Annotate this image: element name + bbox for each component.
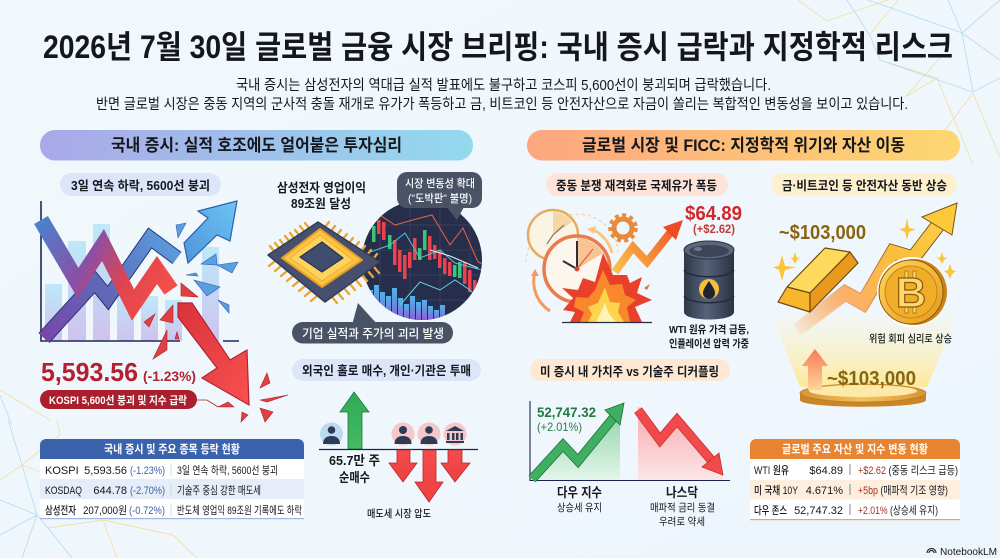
- table: global assets: 글로벌 주요 자산 및 지수 변동 현황: [782, 442, 928, 456]
- callout: KOSPI break: [40, 390, 218, 409]
- Dow value: 52,747.32: [537, 405, 596, 420]
- table: domestic market: 3일 연속 하락, 5600선 붕괴: [177, 463, 278, 477]
- label: safe haven rally: 금·비트코인 등 안전자산 동반 상승: [782, 179, 947, 193]
- text: WTI note: [669, 323, 749, 350]
- table: domestic market: 5,593.56: [84, 465, 127, 477]
- oil price: $64.89: [685, 203, 742, 225]
- KOSPI value: 5,593.56: [41, 357, 138, 387]
- text: selling pressure: 매도세 시장 압도: [367, 507, 431, 520]
- table: global assets: 미 국채 10Y: [754, 484, 799, 497]
- table: global assets: WTI 원유: [754, 463, 789, 477]
- chart: KOSPI crash with breaking arrows: [41, 201, 288, 422]
- icon: investor: [418, 422, 440, 446]
- label: safe haven rally: [771, 173, 957, 196]
- table: domestic market: (-2.70%): [130, 485, 165, 497]
- label: foreigners buying: 외국인 홀로 매수, 개인·기관은 투매: [302, 363, 471, 378]
- text: Dow note: 다우 지수: [557, 485, 602, 500]
- icon: bitcoin coin: B: [896, 269, 926, 316]
- table: domestic market: (-0.72%): [129, 505, 165, 517]
- text: WTI note: WTI 원유 가격 급등,: [669, 323, 749, 336]
- text: Dow note: 상승세 유지: [557, 502, 602, 514]
- table: global assets: [750, 439, 960, 520]
- background network lines: bottom left: [0, 390, 197, 558]
- intro text: [96, 77, 908, 113]
- text: Nasdaq note: [650, 485, 715, 528]
- intro text: 국내 증시는 삼성전자의 역대급 실적 발표에도 불구하고 코스피 5,600선이 붕괴되며 급락했습니다.: [236, 77, 771, 94]
- KOSPI value: [41, 357, 196, 387]
- label: decoupling: [530, 359, 730, 381]
- label: decoupling: 미 증시 내 가치주 vs 기술주 디커플링: [540, 364, 719, 379]
- heading: Samsung operating profit: [277, 181, 366, 211]
- Dow value: [537, 405, 596, 434]
- text: Nasdaq note: 매파적 금리 동결: [650, 502, 715, 514]
- table: global assets: $64.89: [809, 465, 843, 477]
- callout: market volatility: ("도박판" 불명): [408, 192, 472, 205]
- chart: volatile candlestick circle: [362, 200, 485, 320]
- text: net buy volume: [329, 453, 380, 485]
- NotebookLM watermark: NotebookLM: [940, 547, 997, 558]
- table: global assets: +2.01% (상승세 유지): [858, 504, 938, 517]
- text: WTI note: 인플레이션 압력 가중: [669, 337, 749, 350]
- table: domestic market: KOSPI: [45, 465, 79, 477]
- label: three day decline: [60, 173, 221, 196]
- heading: Samsung operating profit: 삼성전자 영업이익: [277, 181, 366, 195]
- intro text: 반면 글로벌 시장은 중동 지역의 군사적 충돌 재개로 유가가 폭등하고 금, 비트코인 등 안전자산으로 자금이 쏠리는 복합적인 변동성을 보이고 있습니다.: [96, 96, 908, 113]
- label: oil surge: 중동 분쟁 재격화로 국제유가 폭등: [556, 178, 717, 193]
- arrow: investor selling: [415, 450, 443, 502]
- arrow: net purchase: [340, 392, 369, 449]
- icon: bitcoin coin: [877, 257, 947, 327]
- icon: sparkles: [773, 218, 956, 281]
- KOSPI value: (-1.23%): [143, 368, 196, 384]
- callout: KOSPI break: KOSPI 5,600선 붕괴 및 지수 급락: [49, 393, 187, 407]
- panel heading: global market: [527, 130, 960, 160]
- table: domestic market: 644.78: [93, 485, 127, 497]
- chart: Dow vs Nasdaq: [530, 401, 730, 480]
- icon: semiconductor chip: [268, 222, 380, 303]
- table: global assets: 4.671%: [806, 485, 843, 497]
- table: global assets: +$2.62 (중동 리스크 급등): [858, 464, 958, 477]
- callout: earnings and stock price divergence: [292, 303, 453, 344]
- icon: gold bar: [778, 248, 858, 312]
- arrow: retail selling: [389, 450, 417, 482]
- icon: foreign investor: [320, 422, 343, 446]
- icon: retail investor: [392, 422, 414, 446]
- label: foreigners buying: [292, 359, 481, 381]
- label: oil surge: [546, 173, 728, 196]
- callout: market volatility: 시장 변동성 확대: [405, 176, 475, 190]
- table: domestic market: 삼성전자: [45, 504, 76, 517]
- illustration: clocks, gear and explosion: [526, 210, 683, 322]
- callout: earnings and stock price divergence: 기업 실적과 주가의 괴리 발생: [302, 327, 444, 341]
- label: three day decline: 3일 연속 하락, 5600선 붕괴: [71, 179, 210, 193]
- panel heading: global market: 글로벌 시장 및 FICC: 지정학적 위기와 자산 이동: [582, 136, 905, 155]
- value: gold price: ~$103,000: [779, 222, 866, 244]
- text: Nasdaq note: 우려로 약세: [659, 516, 705, 528]
- table: domestic market: (-1.23%): [130, 465, 165, 477]
- text: Dow note: [557, 485, 602, 514]
- table: global assets: 다우 존스: [754, 504, 787, 517]
- icon: oil barrel: [684, 241, 734, 320]
- heading: Samsung operating profit: 89조원 달성: [291, 197, 351, 211]
- text: Nasdaq note: 나스닥: [666, 485, 698, 500]
- text: risk aversion: 위험 회피 심리로 상승: [869, 332, 952, 345]
- background network lines: top right: [798, 0, 1000, 165]
- illustration: light beam and podium: [772, 312, 958, 407]
- table: global assets: 52,747.32: [794, 505, 843, 517]
- Dow value: (+2.01%): [537, 420, 582, 434]
- callout: market volatility: [397, 172, 482, 220]
- text: net buy volume: 65.7만 주: [329, 453, 380, 468]
- table: domestic market: [40, 439, 304, 519]
- table: domestic market: 반도체 영업익 89조원 기록에도 하락: [177, 503, 302, 517]
- table: domestic market: KOSDAQ: [45, 485, 82, 497]
- table: domestic market: 207,000원: [83, 504, 127, 517]
- value: bitcoin price: ~$103,000: [827, 368, 916, 390]
- diagram: foreign buy vs retail and institution selling: [319, 392, 478, 520]
- text: net buy volume: 순매수: [339, 470, 370, 485]
- icon: institution bank: [444, 422, 466, 446]
- arrow: institution selling: [441, 450, 470, 482]
- arrow: gold rising: [797, 203, 957, 330]
- oil price: (+$2.62): [693, 222, 735, 236]
- table: global assets: +5bp (매파적 기조 영향): [858, 484, 948, 497]
- panel heading: domestic market: [40, 130, 473, 160]
- oil price: [685, 203, 742, 236]
- table: domestic market: 국내 증시 및 주요 종목 등락 현황: [104, 442, 240, 456]
- table: domestic market: 기술주 중심 강한 매도세: [177, 484, 261, 497]
- panel heading: domestic market: 국내 증시: 실적 호조에도 얼어붙은 투자심리: [111, 135, 402, 155]
